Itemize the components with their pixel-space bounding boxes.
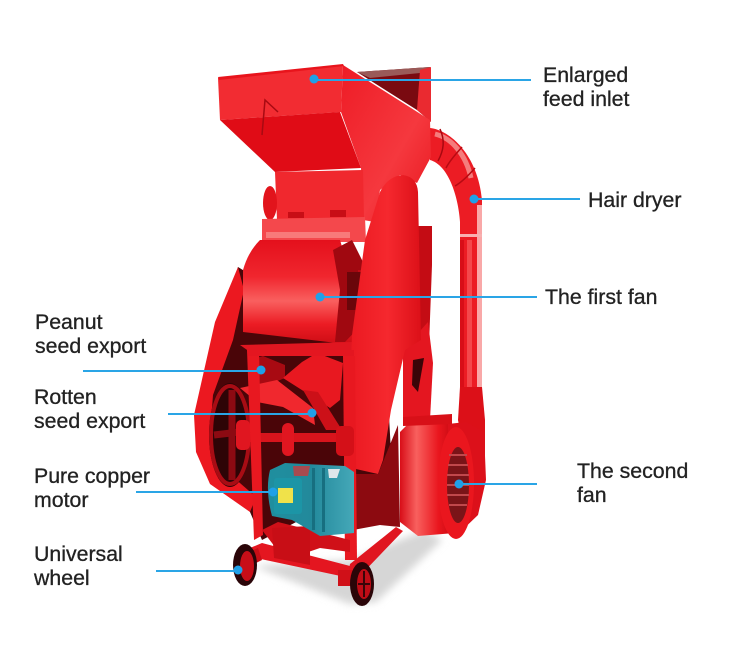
rear bracket and strut [403,226,433,420]
callout: hair dryer [470,188,682,212]
hopper inner dark face [220,112,361,172]
callout: the second fan: fan [577,483,607,507]
callout: peanut seed export: seed export [35,334,146,358]
callout: universal wheel: Universal [34,542,123,566]
machine illustration: red peanut sheller [194,64,486,606]
main leg [347,175,421,474]
callout: pure copper motor: Pure copper [34,464,150,488]
callout: the first fan: The first fan [545,285,657,309]
callout: the second fan: The second [577,459,688,483]
area between leg and fan [353,425,400,530]
flywheel [209,383,251,487]
dark interior behind guard and frame [205,220,392,540]
hopper right face [341,65,431,222]
callout: enlarged feed inlet: feed inlet [543,87,630,111]
seed export chute [240,353,343,430]
callout: rotten seed export [34,385,316,433]
callout: universal wheel: wheel [33,566,90,590]
second fan [400,414,486,539]
callout: peanut seed export [35,310,266,374]
drive shaft with pulleys [236,420,355,450]
callout: enlarged feed inlet [310,63,630,111]
wheel, front right [350,562,374,606]
frame: front posts and cross member [247,350,357,560]
hopper front face [218,65,343,120]
neck [275,170,364,220]
callout: pure copper motor: motor [34,488,88,512]
callout: enlarged feed inlet: Enlarged [543,63,628,87]
suction pipe [430,128,485,470]
hopper back opening [357,67,431,122]
flange [262,210,366,242]
callout: universal wheel [33,542,242,590]
universal wheel, front left [233,544,257,586]
callout: the first fan [316,285,657,309]
callout: pure copper motor [34,464,278,512]
motor [268,463,354,536]
ground shadow [254,530,442,604]
lower frame base [240,522,403,586]
left belt guard [194,267,256,512]
callout: the second fan [454,459,688,507]
drum [240,240,386,352]
callout: peanut seed export: Peanut [35,310,103,334]
callout: rotten seed export: seed export [34,409,145,433]
callout: rotten seed export: Rotten [34,385,97,409]
hopper lever [262,100,278,135]
callout: hair dryer: Hair dryer [588,188,682,212]
shaft pulleys in front of posts [282,423,354,456]
